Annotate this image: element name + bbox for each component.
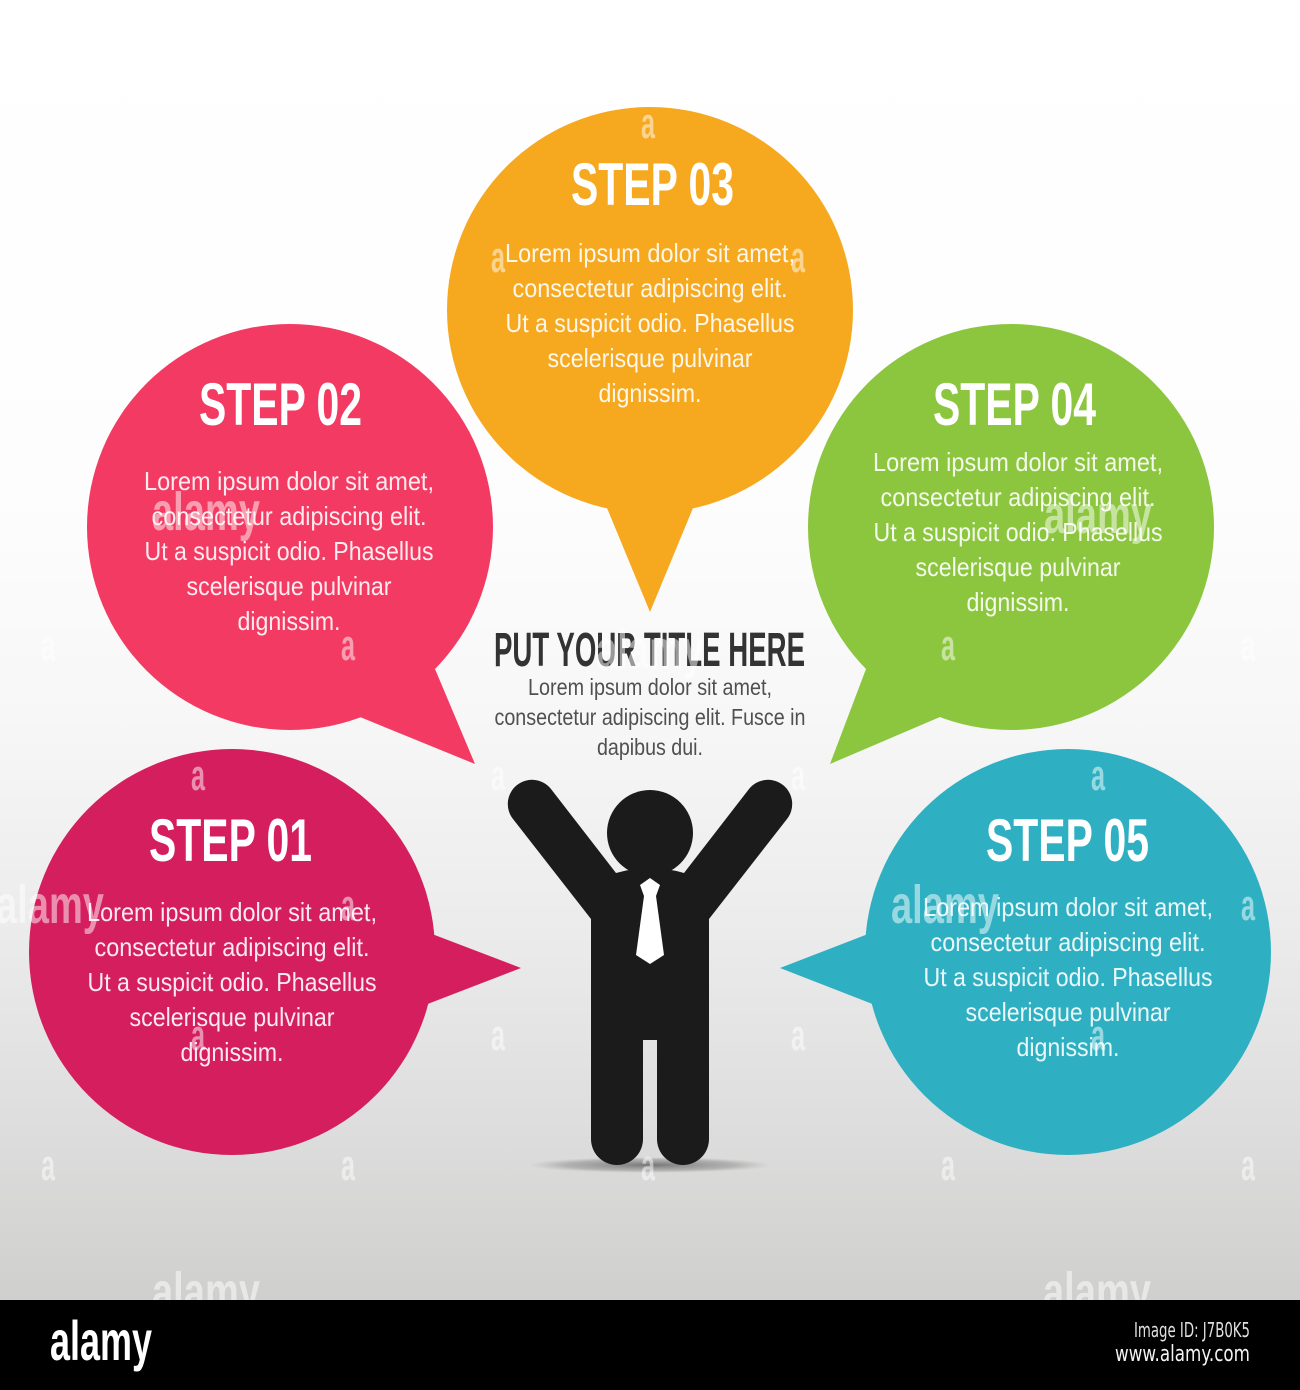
watermark: a <box>791 233 805 282</box>
body text: step 02: scelerisque pulvinar <box>186 571 392 601</box>
shadow under figure <box>528 1157 772 1173</box>
body text: step 05: dignissim. <box>1016 1032 1120 1062</box>
watermark: alamy <box>596 620 704 680</box>
watermark: a <box>791 1011 805 1060</box>
body text: step 01: scelerisque pulvinar <box>130 1002 335 1032</box>
body text: step 01 <box>87 897 377 1067</box>
watermark: a <box>641 99 655 148</box>
body text: step 03: scelerisque pulvinar <box>548 343 753 373</box>
body text: step 01: Lorem ipsum dolor sit amet, <box>87 897 377 927</box>
watermark: a <box>41 1141 55 1190</box>
panel: step 05 <box>780 749 1271 1155</box>
body text: step 05: scelerisque pulvinar <box>966 997 1171 1027</box>
watermark: a <box>191 1011 205 1060</box>
panel: step 03 <box>447 107 853 612</box>
heading: step 03: STEP 03 <box>571 151 734 218</box>
body text: step 04: Ut a suspicit odio. Phasellus <box>874 517 1162 547</box>
heading: step 04: STEP 04 <box>933 371 1096 438</box>
watermark: a <box>191 751 205 800</box>
watermark: a <box>641 1141 655 1190</box>
watermark: a <box>941 1141 955 1190</box>
watermark: alamy <box>1043 1262 1151 1322</box>
watermark: a <box>941 621 955 670</box>
speech bubble: step 04 <box>808 324 1214 764</box>
heading: step 01: STEP 01 <box>149 807 312 874</box>
footer bar <box>0 1300 1300 1390</box>
body text: step 01: dignissim. <box>180 1037 284 1067</box>
watermark: a <box>1241 621 1255 670</box>
watermark: a <box>341 621 355 670</box>
heading: step 05: STEP 05 <box>986 807 1149 874</box>
watermark: alamy <box>152 1262 260 1322</box>
body text: step 05: Ut a suspicit odio. Phasellus <box>924 962 1212 992</box>
body text: step 04: consectetur adipiscing elit. <box>880 482 1156 512</box>
body text: step 02: Ut a suspicit odio. Phasellus <box>144 536 434 566</box>
body text: step 02: consectetur adipiscing elit. <box>152 501 426 531</box>
body text: step 02: Lorem ipsum dolor sit amet, <box>144 466 434 496</box>
watermark: a <box>491 1011 505 1060</box>
center description: Lorem ipsum dolor sit amet, <box>528 674 772 700</box>
watermark: a <box>1091 1011 1105 1060</box>
body text: step 03: consectetur adipiscing elit. <box>512 273 788 303</box>
body text: step 02 <box>144 466 434 636</box>
body text: step 04: dignissim. <box>966 587 1070 617</box>
panel: step 02 <box>87 324 493 764</box>
speech bubble: step 02 <box>87 324 493 764</box>
body text: step 04 <box>873 447 1163 617</box>
title: PUT YOUR TITLE HERE <box>494 624 805 677</box>
watermark: a <box>1241 1141 1255 1190</box>
watermark: alamy <box>891 875 999 935</box>
body text: step 03: Lorem ipsum dolor sit amet, <box>505 238 795 268</box>
watermark: alamy <box>1044 485 1152 545</box>
center description <box>494 674 806 760</box>
watermark: a <box>341 881 355 930</box>
body text: step 05: Lorem ipsum dolor sit amet, <box>923 892 1213 922</box>
body text: step 04: Lorem ipsum dolor sit amet, <box>873 447 1163 477</box>
watermark: a <box>1241 881 1255 930</box>
body text: step 03 <box>505 238 795 408</box>
body text: step 03: Ut a suspicit odio. Phasellus <box>506 308 794 338</box>
footer logo: alamy <box>50 1309 152 1372</box>
watermark: a <box>41 621 55 670</box>
watermark: a <box>341 1141 355 1190</box>
speech bubble: step 03 <box>447 107 853 612</box>
center description: dapibus dui. <box>597 734 703 760</box>
watermark: a <box>791 751 805 800</box>
panel: step 01 <box>29 749 521 1155</box>
body text: step 05: consectetur adipiscing elit. <box>930 927 1206 957</box>
heading: step 02: STEP 02 <box>199 371 362 438</box>
body text: step 04: scelerisque pulvinar <box>916 552 1121 582</box>
watermark: a <box>491 751 505 800</box>
body text: step 01: Ut a suspicit odio. Phasellus <box>88 967 376 997</box>
panel: step 04 <box>808 324 1214 764</box>
speech bubble: step 05 <box>780 749 1271 1155</box>
watermark: a <box>1091 751 1105 800</box>
body text: step 01: consectetur adipiscing elit. <box>94 932 370 962</box>
body text: step 02: dignissim. <box>238 606 340 636</box>
watermark: a <box>491 233 505 282</box>
speech bubble: step 01 <box>29 749 521 1155</box>
watermark: alamy <box>0 875 104 935</box>
body text: step 05 <box>923 892 1213 1062</box>
body text: step 03: dignissim. <box>598 378 702 408</box>
watermark: alamy <box>152 482 260 542</box>
icon: business person with raised arms <box>508 780 792 1165</box>
center description: consectetur adipiscing elit. Fusce in <box>494 704 806 730</box>
website: www.alamy.com <box>1115 1342 1250 1367</box>
